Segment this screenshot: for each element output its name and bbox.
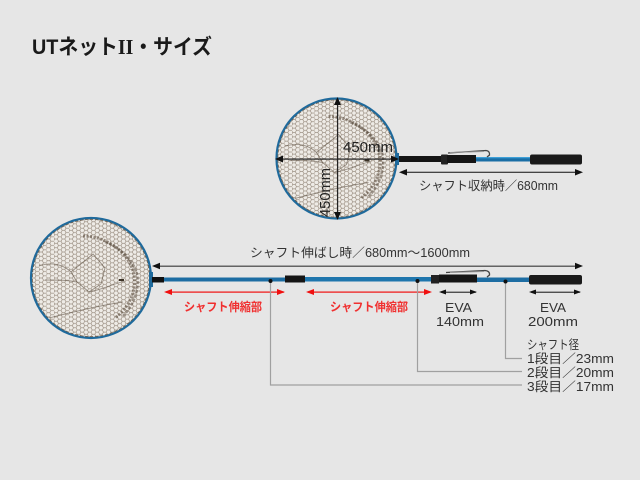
red arrow: telescopic section 1 (164, 289, 285, 295)
label: EVA 200mm: EVA (540, 301, 567, 315)
panel: extended net (31, 218, 614, 394)
label: EVA 200mm: 200mm (528, 315, 578, 329)
shaft diameter labels: シャフト径 (527, 338, 579, 352)
label: EVA 200mm (528, 301, 578, 329)
shaft diameter labels: 1段目／23mm (527, 351, 614, 366)
horizontal dimension arrow (275, 156, 399, 162)
label: telescopic section 2: シャフト伸縮部 (330, 299, 408, 314)
leader dots (268, 279, 508, 284)
stowed length label: シャフト収納時／680mm (419, 178, 558, 193)
leader lines to shaft sections (270, 281, 522, 385)
vertical dimension arrow (334, 97, 341, 220)
icon: stowed net hoop (276, 98, 396, 218)
width label: 450mm (343, 140, 393, 156)
title: UTネットII・サイズ (32, 35, 212, 59)
extended shaft and handle (149, 270, 582, 287)
arrow: EVA 200 (529, 290, 581, 294)
shaft diameter labels (527, 338, 614, 394)
arrow: EVA 140 (439, 290, 477, 294)
panel: stowed net (275, 97, 583, 220)
stowed shaft and handle (395, 150, 582, 165)
stowed length arrow (399, 169, 583, 176)
label: telescopic section 1: シャフト伸縮部 (184, 299, 262, 314)
label: EVA 140mm: 140mm (436, 315, 484, 329)
height label: 450mm (318, 168, 334, 217)
shaft diameter labels: 3段目／17mm (527, 379, 614, 394)
extended length arrow (152, 263, 583, 269)
shaft diameter labels: 2段目／20mm (527, 365, 614, 380)
red arrow: telescopic section 2 (306, 289, 432, 295)
icon: extended net hoop (31, 218, 151, 338)
label: EVA 140mm (436, 301, 484, 329)
extended length label: シャフト伸ばし時／680mm～1600mm (250, 246, 470, 260)
label: EVA 140mm: EVA (445, 301, 473, 315)
